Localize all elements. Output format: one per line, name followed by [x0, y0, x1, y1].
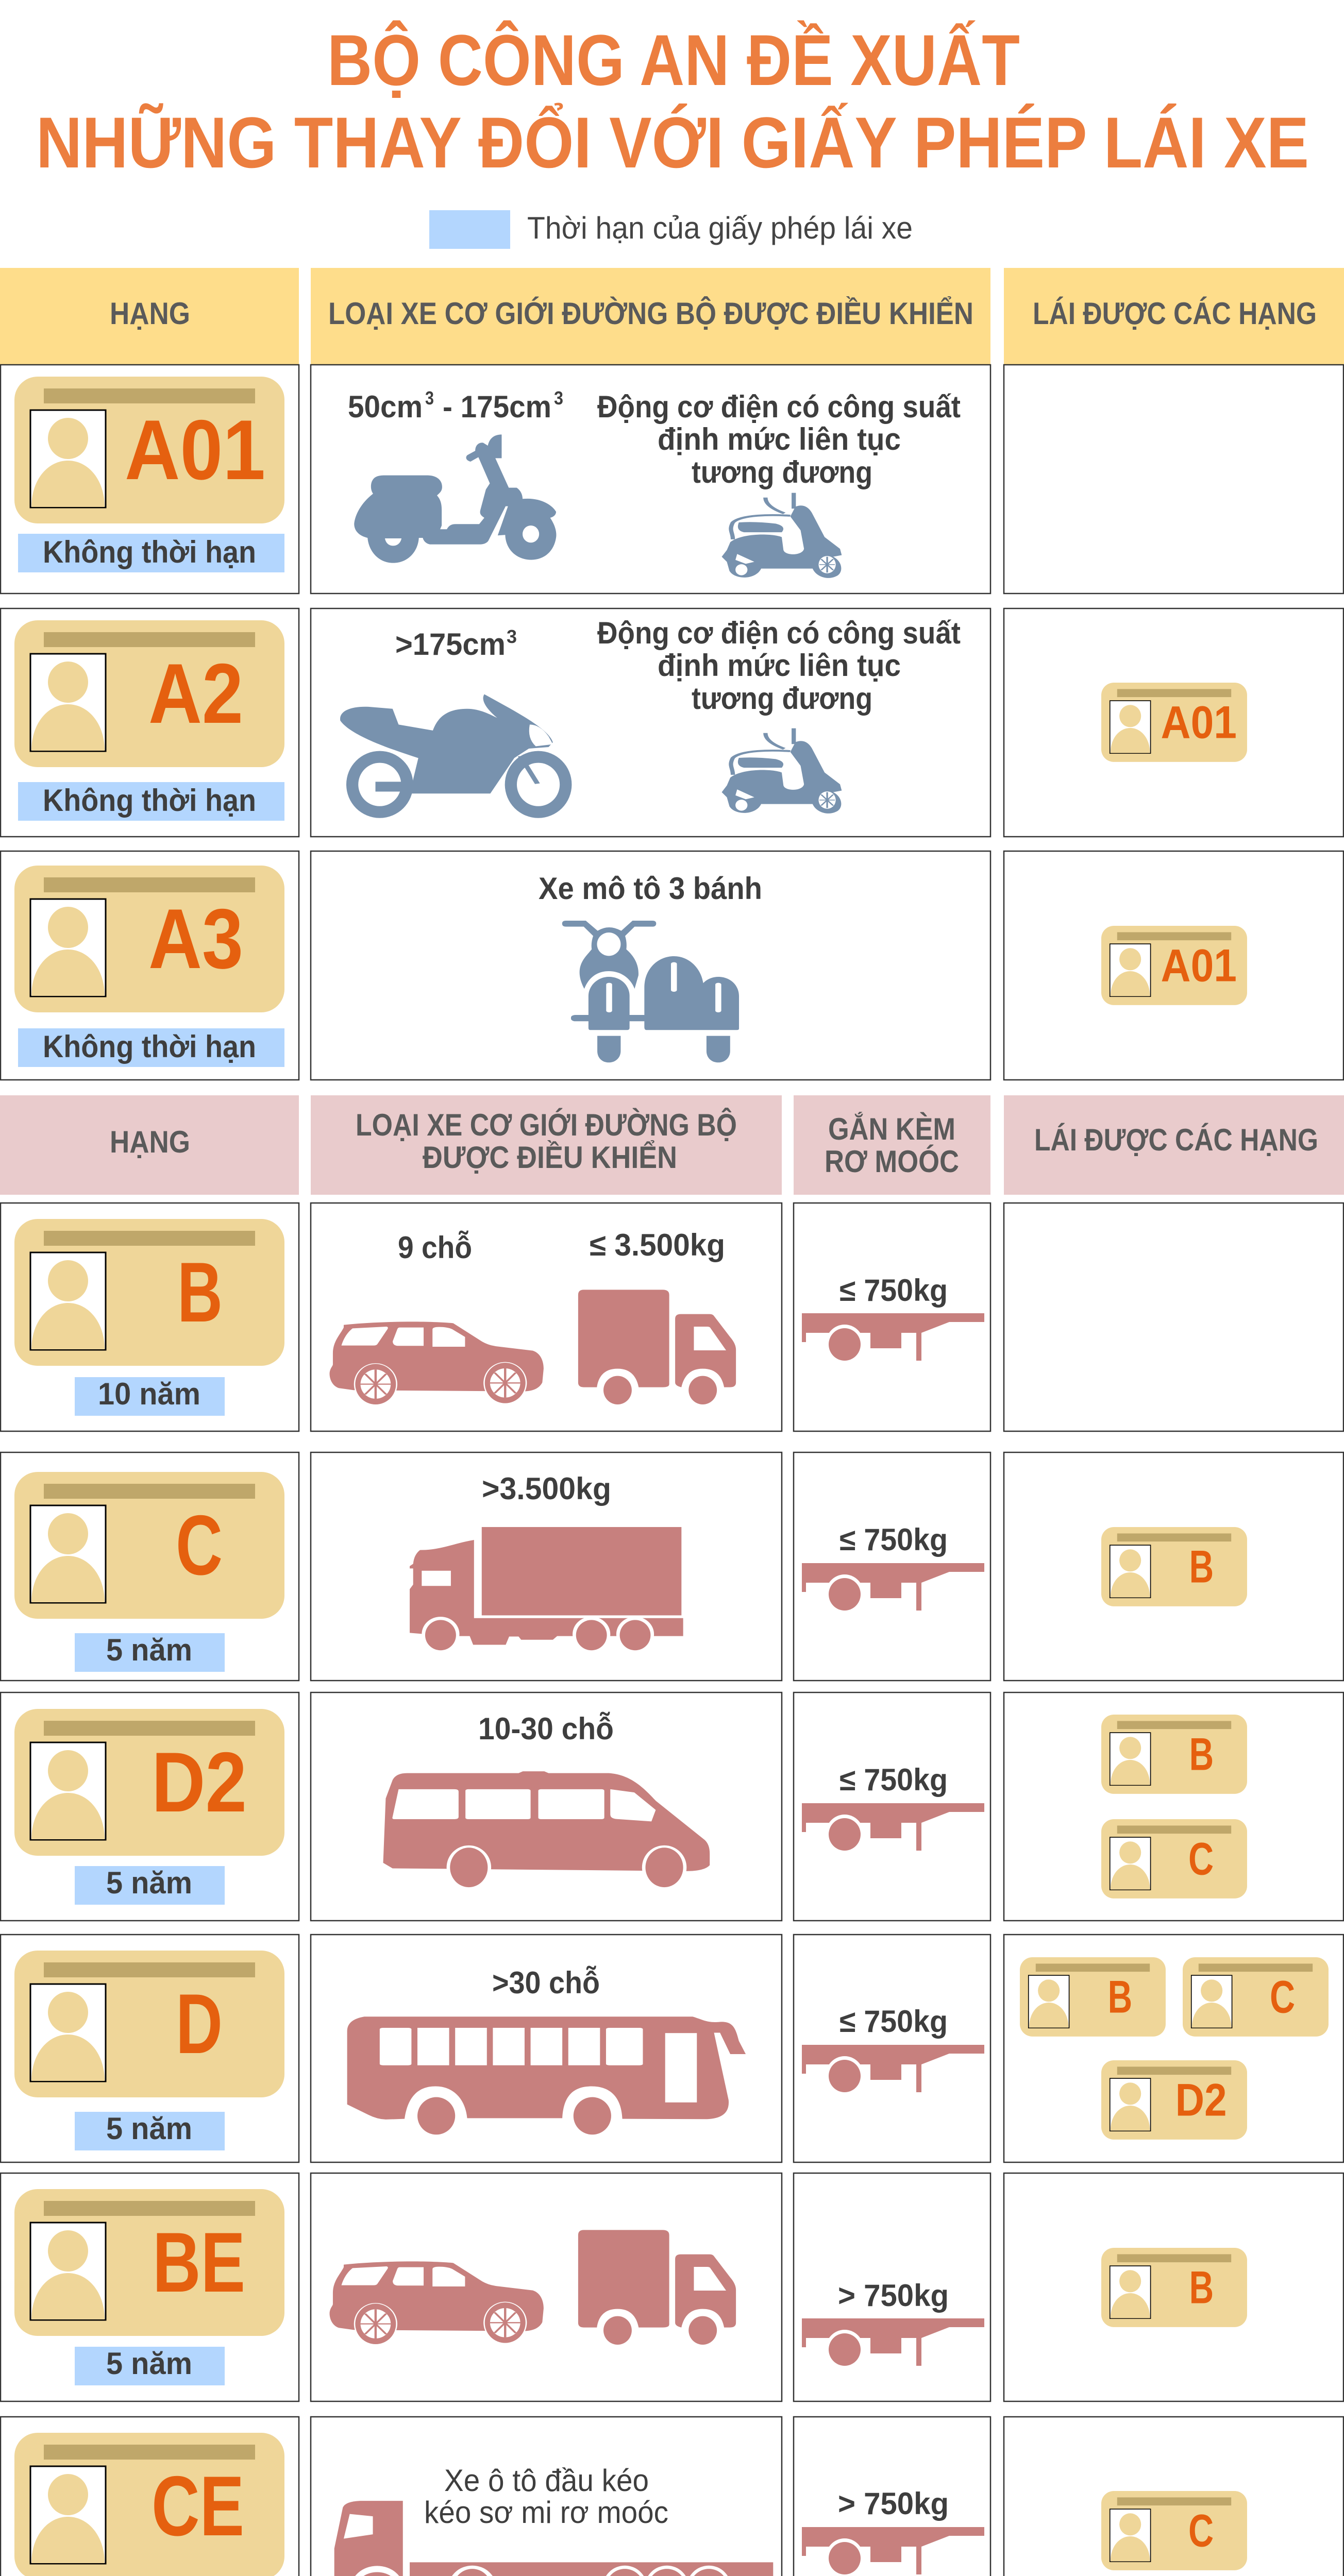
row: A3 — [1, 851, 1343, 1080]
small card B: B — [1189, 1728, 1214, 1780]
row: D — [1, 1935, 1343, 2162]
small card B: B — [1189, 1540, 1214, 1592]
small card C — [1101, 2491, 1247, 2570]
trailer weight: ≤ 750kg — [839, 1522, 948, 1557]
electric motor label — [597, 389, 961, 489]
row: D2 — [1, 1692, 1343, 1921]
small card D2 — [1101, 2060, 1247, 2140]
engine capacity label: 3 — [425, 387, 434, 409]
icon: electric scooter — [721, 493, 842, 578]
small card D2: D2 — [1175, 2074, 1227, 2125]
engine capacity label: 3 — [554, 387, 563, 409]
licence card B — [14, 1219, 284, 1366]
table header: car section: HẠNG — [110, 1125, 190, 1159]
icon: truck — [578, 1290, 736, 1404]
icon: trailer — [802, 2527, 984, 2576]
duration C — [75, 1633, 225, 1672]
licence card D — [14, 1951, 284, 2097]
icon: trailer — [802, 2318, 984, 2369]
icon: electric scooter — [721, 728, 842, 814]
trailer weight: ≤ 750kg — [839, 2004, 948, 2039]
three wheel label: Xe mô tô 3 bánh — [539, 871, 762, 906]
small card A01: A01 — [1161, 696, 1237, 748]
trailer weight: > 750kg — [838, 2278, 949, 2313]
duration B — [75, 1377, 225, 1416]
row: BE — [1, 2173, 1343, 2401]
title — [36, 20, 1309, 183]
icon: van — [383, 1771, 710, 1890]
duration D — [75, 2111, 225, 2150]
small card C: C — [1270, 1971, 1295, 2022]
engine capacity label — [348, 387, 563, 424]
icon: large truck — [410, 1527, 683, 1652]
legend: Thời hạn của giấy phép lái xe — [527, 211, 913, 245]
duration BE: 5 năm — [106, 2346, 192, 2381]
licence card D2 — [14, 1709, 284, 1856]
icon: tractor with semi trailer — [334, 2501, 773, 2576]
duration D: 5 năm — [106, 2111, 192, 2146]
duration D2: 5 năm — [106, 1866, 192, 1900]
icon: sidecar motorcycle — [562, 921, 739, 1062]
row: CE — [1, 2417, 1343, 2576]
icon: truck — [578, 2230, 736, 2345]
icon: car — [330, 1321, 544, 1405]
duration A2: Không thời hạn — [43, 783, 256, 818]
seats label: 10-30 chỗ — [478, 1711, 614, 1746]
small card B — [1101, 1715, 1247, 1794]
seats label: >30 chỗ — [492, 1965, 600, 2000]
weight label: >3.500kg — [482, 1471, 611, 1506]
licence card D2: D2 — [152, 1735, 247, 1829]
licence card C: C — [176, 1498, 223, 1592]
icon: scooter — [354, 434, 556, 563]
licence card A3 — [14, 866, 284, 1012]
licence card C — [14, 1472, 284, 1619]
licence card A01: A01 — [125, 402, 265, 497]
small card B — [1101, 2248, 1247, 2327]
small card A01: A01 — [1161, 939, 1237, 991]
licence card BE: BE — [153, 2215, 245, 2310]
licence card CE: CE — [152, 2459, 244, 2553]
trailer weight: ≤ 750kg — [839, 1273, 948, 1308]
icon: car — [330, 2261, 544, 2345]
licence card D: D — [176, 1976, 223, 2071]
electric motor label: Động cơ điện có công suất — [597, 389, 961, 424]
small card C: C — [1188, 1833, 1214, 1884]
engine capacity label: 50cm — [348, 389, 423, 424]
weight label: ≤ 3.500kg — [590, 1228, 725, 1262]
engine capacity label: >175cm — [395, 627, 506, 662]
small card A01 — [1101, 683, 1247, 762]
small card B — [1020, 1957, 1166, 2037]
licence card BE — [14, 2189, 284, 2336]
licence card A01 — [14, 377, 284, 523]
table header: car section: GẮN KÈM — [828, 1112, 955, 1146]
duration BE — [75, 2346, 225, 2385]
table header: motorcycle section — [0, 268, 1344, 365]
engine capacity label: 3 — [507, 626, 517, 647]
licence card A2: A2 — [148, 646, 243, 741]
duration B: 10 năm — [98, 1377, 200, 1411]
seats label: 9 chỗ — [398, 1230, 472, 1265]
tractor label: kéo sơ mi rơ moóc — [424, 2495, 668, 2530]
engine capacity label: - 175cm — [443, 389, 551, 424]
table header: car section — [0, 1095, 1344, 1195]
tractor label — [424, 2463, 668, 2530]
duration C: 5 năm — [106, 1633, 192, 1667]
trailer weight: ≤ 750kg — [839, 1762, 948, 1797]
row: C — [1, 1452, 1343, 1681]
licence card B: B — [177, 1245, 223, 1340]
icon: trailer — [802, 1803, 984, 1854]
small card C: C — [1188, 2504, 1214, 2556]
electric motor label: tương đương — [692, 455, 872, 489]
small card B: B — [1108, 1971, 1132, 2022]
small card C — [1101, 1819, 1247, 1899]
trailer weight: > 750kg — [838, 2486, 949, 2521]
table header: motorcycle section: HẠNG — [110, 296, 190, 331]
licence card A3: A3 — [148, 891, 243, 986]
duration A3: Không thời hạn — [43, 1029, 256, 1064]
table header: motorcycle section: LOẠI XE CƠ GIỚI ĐƯỜNG BỘ ĐƯỢC ĐIỀU KHIỂN — [328, 296, 973, 331]
title: BỘ CÔNG AN ĐỀ XUẤT — [327, 20, 1020, 100]
table header: car section: RƠ MOÓC — [825, 1144, 959, 1179]
icon: trailer — [802, 2045, 984, 2095]
electric motor label: Động cơ điện có công suất — [597, 616, 961, 650]
electric motor label: định mức liên tục — [658, 422, 901, 456]
table header: car section: ĐƯỢC ĐIỀU KHIỂN — [423, 1140, 677, 1175]
small card A01 — [1101, 926, 1247, 1005]
icon: trailer — [802, 1563, 984, 1614]
small card C — [1183, 1957, 1329, 2037]
legend — [429, 210, 913, 249]
electric motor label: định mức liên tục — [658, 648, 901, 683]
licence card A2 — [14, 620, 284, 767]
row: B — [1, 1203, 1343, 1431]
row: A01 — [1, 365, 1343, 594]
icon: trailer — [802, 1313, 984, 1364]
table header: car section: LOẠI XE CƠ GIỚI ĐƯỜNG BỘ — [356, 1108, 737, 1142]
duration A01: Không thời hạn — [43, 535, 256, 569]
row: A2 — [1, 608, 1343, 837]
icon: motorbike — [340, 694, 572, 818]
tractor label: Xe ô tô đầu kéo — [444, 2463, 649, 2498]
small card B: B — [1189, 2261, 1214, 2313]
icon: bus — [347, 2016, 746, 2134]
electric motor label — [597, 616, 961, 716]
licence card CE — [14, 2433, 284, 2576]
duration D2 — [75, 1866, 225, 1905]
small card B — [1101, 1527, 1247, 1606]
electric motor label: tương đương — [692, 681, 872, 716]
